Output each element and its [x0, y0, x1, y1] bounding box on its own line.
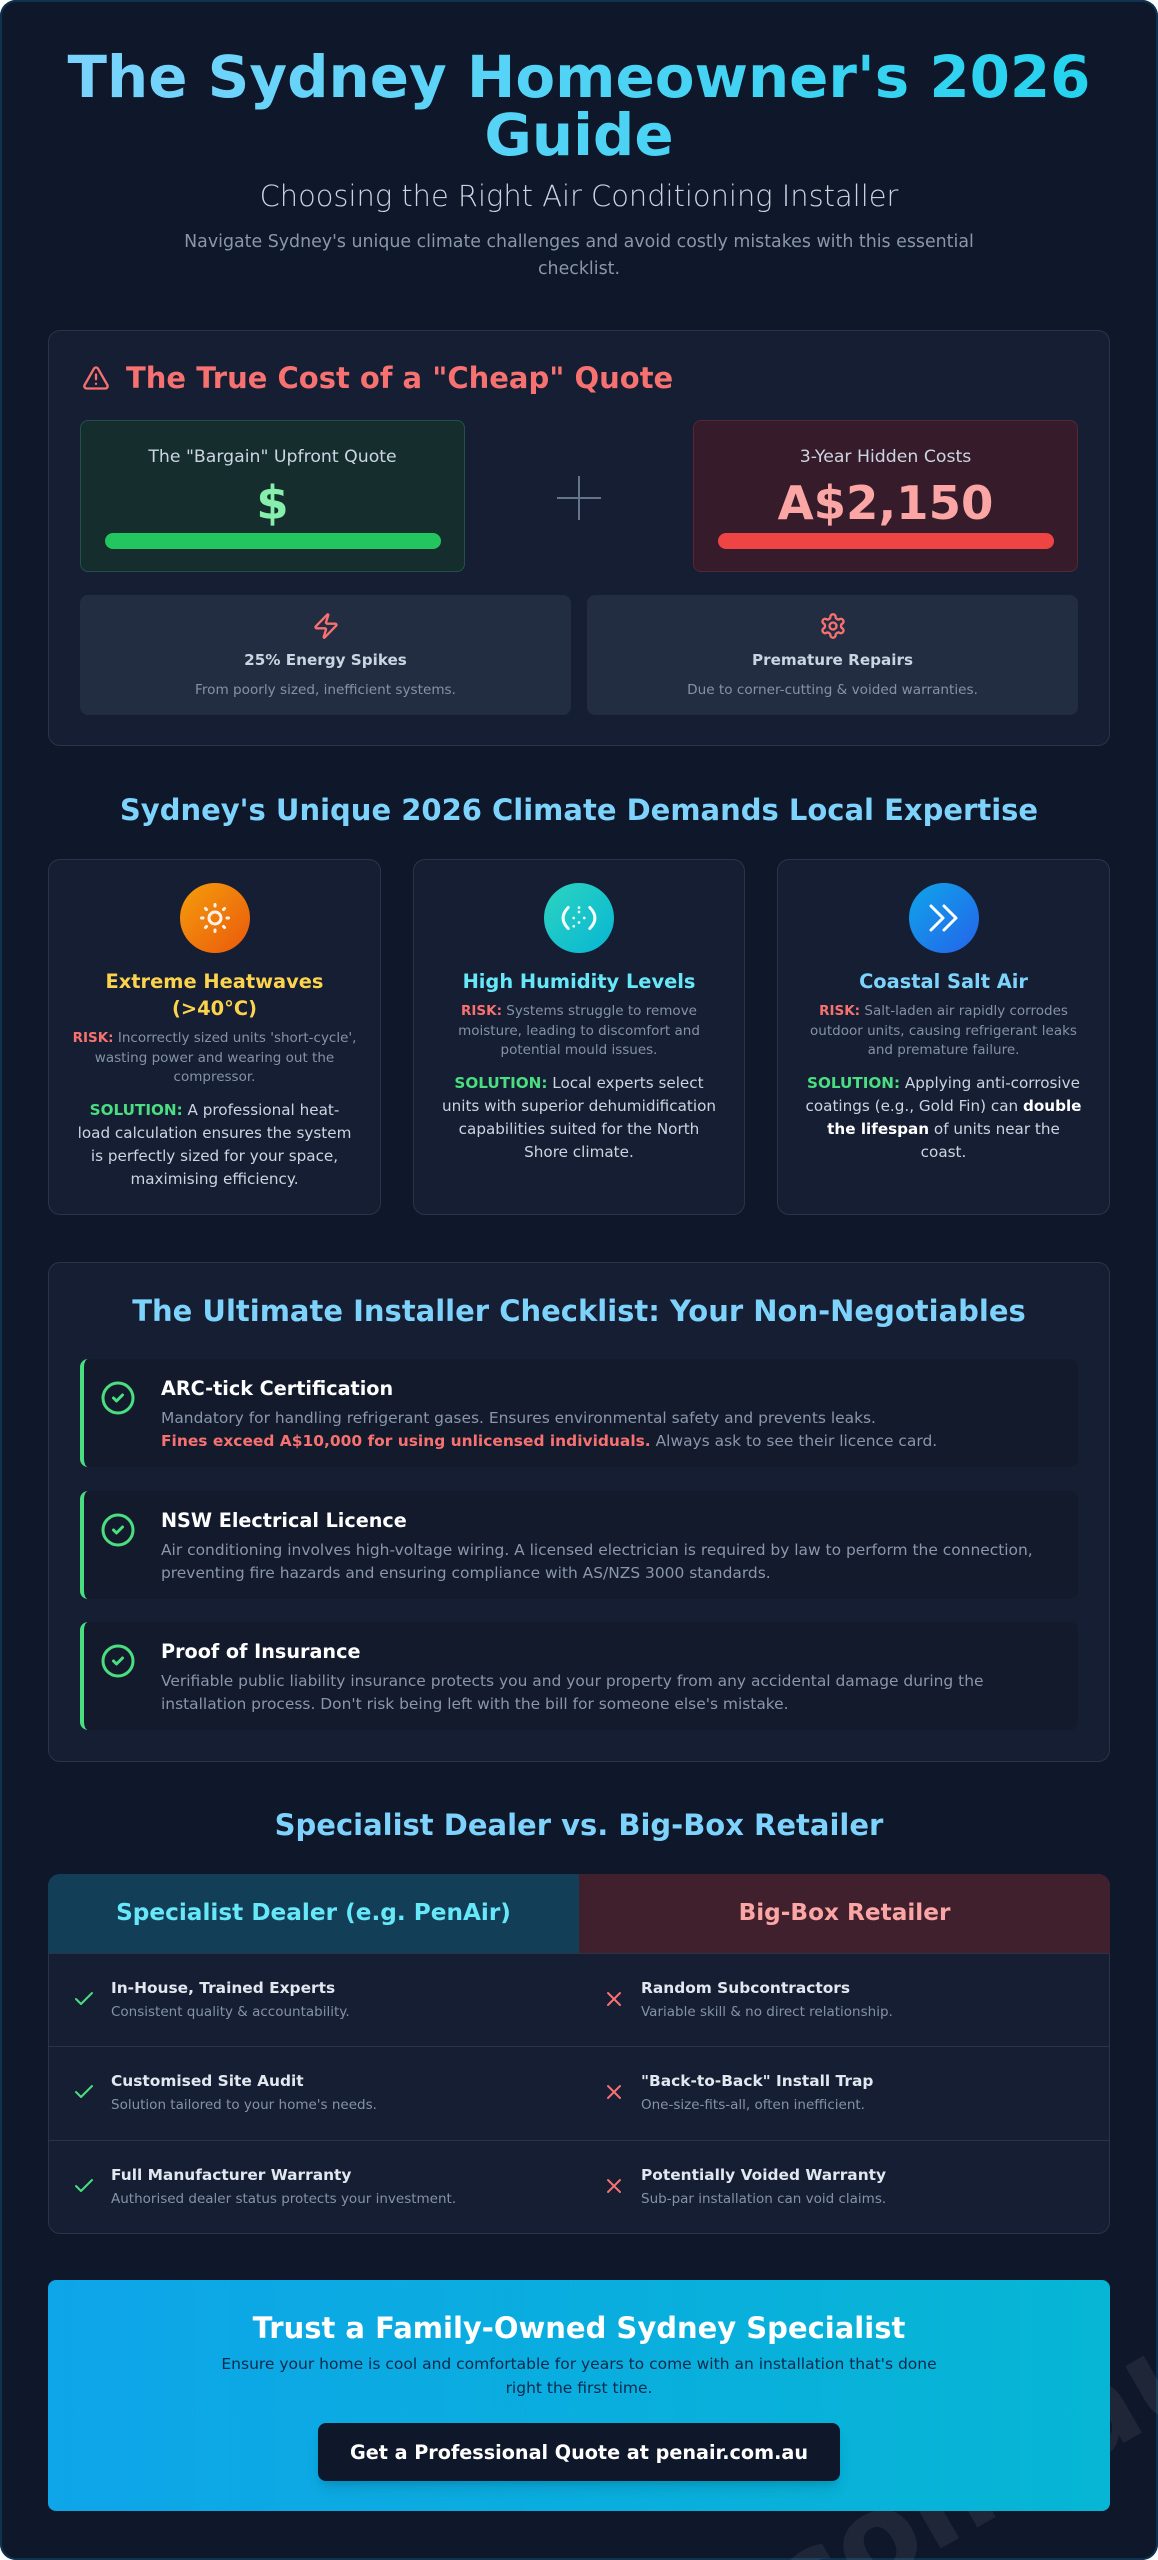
title: Guide: [484, 101, 674, 169]
cta text: [221, 2355, 937, 2396]
solution text: is perfectly sized for your space,: [91, 1147, 338, 1165]
specialist detail: Authorised dealer status protects your investment.: [111, 2191, 456, 2207]
item title: Proof of Insurance: [161, 1640, 360, 1663]
heading: comparison: Specialist Dealer vs. Big-Box Retailer: [275, 1808, 883, 1842]
icon: cross: [607, 2085, 621, 2099]
icon: gear: [821, 613, 845, 639]
cta text: right the first time.: [506, 2378, 652, 2396]
text: energy spikes title: 25% Energy Spikes: [244, 651, 407, 669]
solution text: coast.: [921, 1143, 966, 1161]
risk text: moisture, leading to discomfort and: [458, 1022, 700, 1038]
column header: specialist: [48, 1874, 579, 1953]
item description: [161, 1541, 1033, 1582]
intro text: Navigate Sydney's unique climate challenges and avoid costly mistakes with this essential: [184, 232, 974, 252]
risk text: outdoor units, causing refrigerant leaks: [810, 1022, 1077, 1038]
label: hidden costs: 3-Year Hidden Costs: [800, 447, 971, 467]
card title: High Humidity Levels: [463, 970, 695, 993]
solution text: SOLUTION: Local experts select: [454, 1074, 704, 1092]
item description: Air conditioning involves high-voltage wiring. A licensed electrician is required by law to perform the connection,: [161, 1541, 1033, 1559]
card: high humidity: [413, 859, 745, 1215]
comparison table: [48, 1874, 1110, 2234]
specialist detail: Consistent quality & accountability.: [111, 2004, 350, 2020]
icon: sun: [180, 883, 250, 953]
specialist point: Customised Site Audit: [111, 2072, 304, 2090]
risk text: potential mould issues.: [501, 1042, 657, 1058]
column header: big-box: [579, 1874, 1110, 1953]
risk text: RISK: Incorrectly sized units 'short-cycle',: [73, 1030, 356, 1046]
card: premature repairs: [587, 595, 1078, 715]
header text: Specialist Dealer (e.g. PenAir): [116, 1899, 511, 1926]
header text: Big-Box Retailer: [739, 1899, 950, 1926]
cta text: Ensure your home is cool and comfortable for years to come with an installation that's done: [221, 2355, 937, 2373]
solution text: load calculation ensures the system: [78, 1124, 351, 1142]
retailer detail: One-size-fits-all, often inefficient.: [641, 2097, 865, 2113]
solution text: SOLUTION: A professional heat-: [90, 1101, 339, 1119]
call to action: [48, 2280, 1110, 2511]
panel: true cost of a cheap quote: [48, 330, 1110, 746]
subtitle: Choosing the Right Air Conditioning Installer: [260, 179, 898, 213]
item title: ARC-tick Certification: [161, 1377, 393, 1400]
item description: preventing fire hazards and ensuring compliance with AS/NZS 3000 standards.: [161, 1564, 771, 1582]
card title: Extreme Heatwaves: [106, 970, 323, 993]
quote box: upfront: [80, 420, 465, 572]
solution text: capabilities suited for the North: [459, 1120, 699, 1138]
solution text: [442, 1074, 716, 1161]
icon: warning triangle: [83, 366, 109, 390]
icon: check: [75, 2179, 93, 2192]
heading: checklist: The Ultimate Installer Checklist: Your Non-Negotiables: [132, 1294, 1026, 1328]
text: premature repairs description: Due to corner-cutting & voided warranties.: [687, 682, 978, 698]
risk text: compressor.: [174, 1069, 255, 1085]
specialist detail: Solution tailored to your home's needs.: [111, 2097, 377, 2113]
solution text: coatings (e.g., Gold Fin) can double: [806, 1097, 1081, 1115]
cta button: [318, 2423, 840, 2481]
item description: Verifiable public liability insurance protects you and your property from any accidental damage during the: [161, 1672, 983, 1690]
cta heading: Trust a Family-Owned Sydney Specialist: [253, 2311, 905, 2345]
solution text: [78, 1101, 351, 1188]
item description: [161, 1409, 937, 1450]
retailer point: Random Subcontractors: [641, 1979, 850, 1997]
icon: cross: [607, 2179, 621, 2193]
item: ARC-tick: [80, 1359, 1078, 1467]
risk text: RISK: Systems struggle to remove: [461, 1003, 697, 1019]
text: premature repairs title: Premature Repairs: [752, 651, 913, 669]
item: insurance: [80, 1622, 1078, 1730]
heading: climate: Sydney's Unique 2026 Climate Demands Local Expertise: [120, 793, 1038, 827]
title: [40, 48, 1118, 164]
solution text: Shore climate.: [524, 1143, 634, 1161]
retailer point: "Back-to-Back" Install Trap: [641, 2072, 873, 2090]
risk text: wasting power and wearing out the: [95, 1050, 334, 1066]
icon: cross: [607, 1992, 621, 2006]
text: energy spikes description: From poorly sized, inefficient systems.: [195, 682, 456, 698]
panel: installer checklist: [48, 1262, 1110, 1762]
specialist point: Full Manufacturer Warranty: [111, 2166, 351, 2184]
row 2: [48, 2046, 1110, 2140]
retailer detail: Variable skill & no direct relationship.: [641, 2004, 893, 2020]
risk text: [810, 1003, 1077, 1058]
solution text: SOLUTION: Applying anti-corrosive: [807, 1074, 1080, 1092]
card title: [106, 970, 323, 1020]
solution text: the lifespan of units near the: [827, 1120, 1060, 1138]
item title: NSW Electrical Licence: [161, 1509, 407, 1532]
icon: check circle: [102, 1382, 134, 1414]
card: energy spikes: [80, 595, 571, 715]
icon: check: [75, 2085, 93, 2098]
icon: plus: [557, 476, 601, 520]
item description: [161, 1672, 983, 1713]
risk text: RISK: Salt-laden air rapidly corrodes: [819, 1003, 1068, 1019]
risk text: [458, 1003, 700, 1058]
solution text: units with superior dehumidification: [442, 1097, 716, 1115]
dollar sign: $: [256, 476, 289, 530]
title: The Sydney Homeowner's 2026: [68, 43, 1090, 111]
solution text: maximising efficiency.: [130, 1170, 299, 1188]
icon: wind chevrons: [908, 883, 978, 953]
intro text: [184, 232, 974, 279]
card: coastal salt air: [777, 859, 1110, 1215]
specialist point: In-House, Trained Experts: [111, 1979, 335, 1997]
intro text: checklist.: [538, 259, 620, 279]
risk text: [73, 1030, 356, 1085]
icon: check circle: [102, 1514, 134, 1546]
card: extreme heatwaves: [48, 859, 381, 1215]
solution text: [806, 1074, 1081, 1161]
row 3: [48, 2140, 1110, 2234]
icon: check circle: [102, 1644, 134, 1678]
icon: humidity: [544, 883, 614, 953]
item description: Mandatory for handling refrigerant gases. Ensures environmental safety and prevents leaks.: [161, 1409, 876, 1427]
row 1: [48, 1953, 1110, 2047]
item description: installation process. Don't risk being left with the bill for someone else's mistake.: [161, 1695, 789, 1713]
item description: Fines exceed A$10,000 for using unlicensed individuals. Always ask to see their licence card.: [161, 1432, 937, 1450]
heading: true cost: The True Cost of a "Cheap" Quote: [126, 361, 673, 395]
button label: Get a Professional Quote at penair.com.au: [350, 2441, 808, 2464]
risk text: and premature failure.: [868, 1042, 1019, 1058]
icon: lightning: [314, 613, 338, 639]
label: upfront quote: The "Bargain" Upfront Quote: [148, 447, 397, 467]
amount: A$2,150: [778, 476, 993, 530]
quote box: hidden costs: [693, 420, 1078, 572]
bar: green: [105, 533, 441, 549]
card title: (>40°C): [172, 997, 257, 1020]
bar: red: [718, 533, 1054, 549]
retailer detail: Sub-par installation can void claims.: [641, 2191, 886, 2207]
retailer point: Potentially Voided Warranty: [641, 2166, 886, 2184]
card title: Coastal Salt Air: [859, 970, 1028, 993]
icon: check: [75, 1992, 93, 2005]
item: electrical licence: [80, 1491, 1078, 1599]
